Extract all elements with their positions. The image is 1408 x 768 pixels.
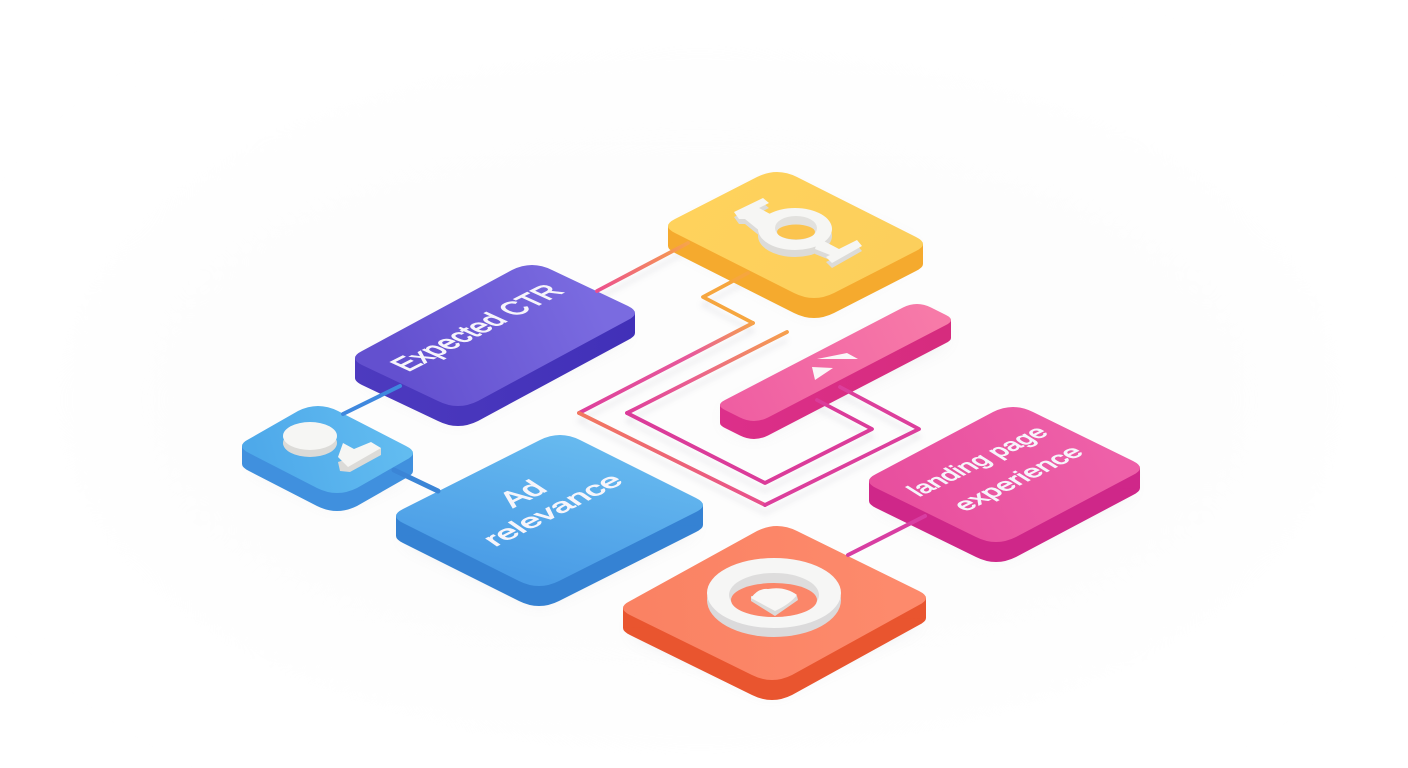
block top xyxy=(720,304,951,421)
connector: small blue block to Ad relevance xyxy=(394,470,438,491)
triangle lower xyxy=(812,367,833,380)
block side xyxy=(720,320,951,439)
triangle upper xyxy=(817,353,858,359)
label line: relevance: relevance xyxy=(477,470,630,550)
block shadow xyxy=(254,432,401,500)
block top xyxy=(623,526,926,680)
ring inner wall xyxy=(729,573,819,617)
panel: orange target block xyxy=(623,526,926,700)
block side xyxy=(623,546,926,700)
icon: person disc and base xyxy=(283,422,381,472)
icon top xyxy=(734,198,862,263)
block shadow xyxy=(879,432,1130,552)
icon: white triangles xyxy=(812,353,858,380)
block side xyxy=(668,192,923,318)
connector lines xyxy=(343,243,925,555)
panel: small blue icon block xyxy=(242,406,413,511)
block side xyxy=(355,285,635,426)
connector: inner circuit upper run xyxy=(627,332,787,413)
panel: Expected CTR block xyxy=(355,265,635,426)
label: Ad relevance xyxy=(477,470,630,550)
connector shadows xyxy=(579,251,919,513)
connector: inner circuit return to pink bar xyxy=(627,400,872,483)
block shadow xyxy=(726,322,945,430)
connector: Expected CTR to small blue block xyxy=(343,386,400,414)
ring hole floor xyxy=(777,224,815,240)
block side xyxy=(869,427,1140,562)
block shadow xyxy=(365,290,625,416)
ring top xyxy=(707,558,841,628)
block shadow xyxy=(633,552,916,688)
block side xyxy=(396,455,703,606)
connector: yellow block to outer circuit start xyxy=(703,273,753,323)
soft background glow xyxy=(100,100,1300,700)
label line: landing page: landing page xyxy=(902,423,1055,500)
label line: experience: experience xyxy=(948,442,1089,515)
shield edge xyxy=(751,596,798,616)
base top xyxy=(338,442,381,467)
connector: outer circuit lower run xyxy=(579,413,765,505)
block top xyxy=(668,172,923,298)
base edge xyxy=(338,448,381,472)
label: Expected CTR: Expected CTR xyxy=(383,281,572,375)
label: landing page experience xyxy=(902,423,1089,515)
block shadow xyxy=(406,462,693,598)
panel: pink slim bar block xyxy=(720,304,951,439)
icon: ring with two T bars xyxy=(734,198,862,268)
ring edge xyxy=(707,563,841,637)
disc top xyxy=(283,422,337,450)
disc edge xyxy=(283,429,337,457)
block top xyxy=(396,435,703,586)
connector: landing page block to orange block xyxy=(848,516,925,555)
panel: Ad relevance block xyxy=(396,435,703,606)
ring hole xyxy=(775,216,817,240)
panel: yellow gauge block xyxy=(668,172,923,318)
connector: outer circuit upper run xyxy=(579,323,753,413)
icon extrusion xyxy=(734,203,862,268)
label line: Ad: Ad xyxy=(491,476,554,512)
ring floor xyxy=(731,583,817,617)
block shadow xyxy=(680,190,912,308)
block top xyxy=(242,406,413,493)
block top xyxy=(869,407,1140,542)
icon: ring with shield xyxy=(707,558,841,637)
shield top xyxy=(751,588,797,611)
connector: outer circuit return to pink bar xyxy=(765,387,919,505)
connector: Expected CTR to yellow block xyxy=(597,243,688,291)
panel: landing page experience block xyxy=(869,407,1140,562)
block side xyxy=(242,424,413,511)
block top xyxy=(355,265,635,406)
